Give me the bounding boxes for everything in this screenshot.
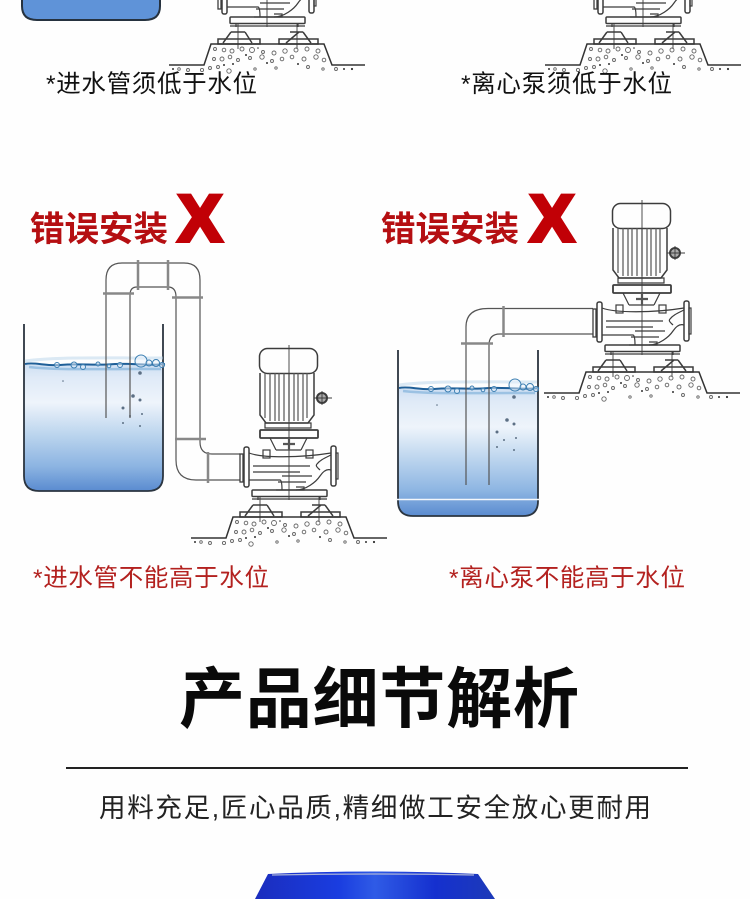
caption: pump below water: *离心泵须低于水位 bbox=[461, 70, 672, 98]
heading: wrong install left bbox=[30, 181, 222, 255]
elbow intake pipe bbox=[461, 306, 593, 485]
title: 产品细节解析 bbox=[179, 662, 579, 736]
correct install right: pump base bbox=[545, 0, 741, 73]
heading: wrong install right: 错误安装 bbox=[381, 211, 519, 249]
centrifugal pump bbox=[191, 345, 387, 546]
subtitle: 用料充足,匠心品质,精细做工安全放心更耐用 bbox=[99, 793, 651, 823]
caption: intake below water: *进水管须低于水位 bbox=[46, 70, 257, 98]
pump base bbox=[169, 0, 365, 73]
icon: red X: X bbox=[530, 181, 574, 255]
diagram: wrong install, intake above water bbox=[24, 260, 387, 546]
water tank bbox=[396, 350, 540, 516]
centrifugal pump bbox=[544, 200, 740, 401]
heading: wrong install right bbox=[381, 181, 574, 255]
caption: intake must not be above water: *进水管不能高于水位 bbox=[33, 564, 269, 592]
diagram: wrong install, pump above water bbox=[396, 200, 740, 516]
icon: red X: X bbox=[178, 181, 222, 255]
product top: blue pump cap bbox=[255, 872, 495, 899]
water tank bbox=[24, 324, 165, 491]
icon: water tank bottom bbox=[22, 0, 160, 20]
heading: wrong install left: 错误安装 bbox=[30, 211, 168, 249]
divider bbox=[66, 767, 688, 769]
caption: pump must not be above water: *离心泵不能高于水位 bbox=[449, 564, 685, 592]
correct install left: tank bottom and pump base bbox=[22, 0, 365, 73]
inverted U intake pipe bbox=[103, 260, 240, 483]
